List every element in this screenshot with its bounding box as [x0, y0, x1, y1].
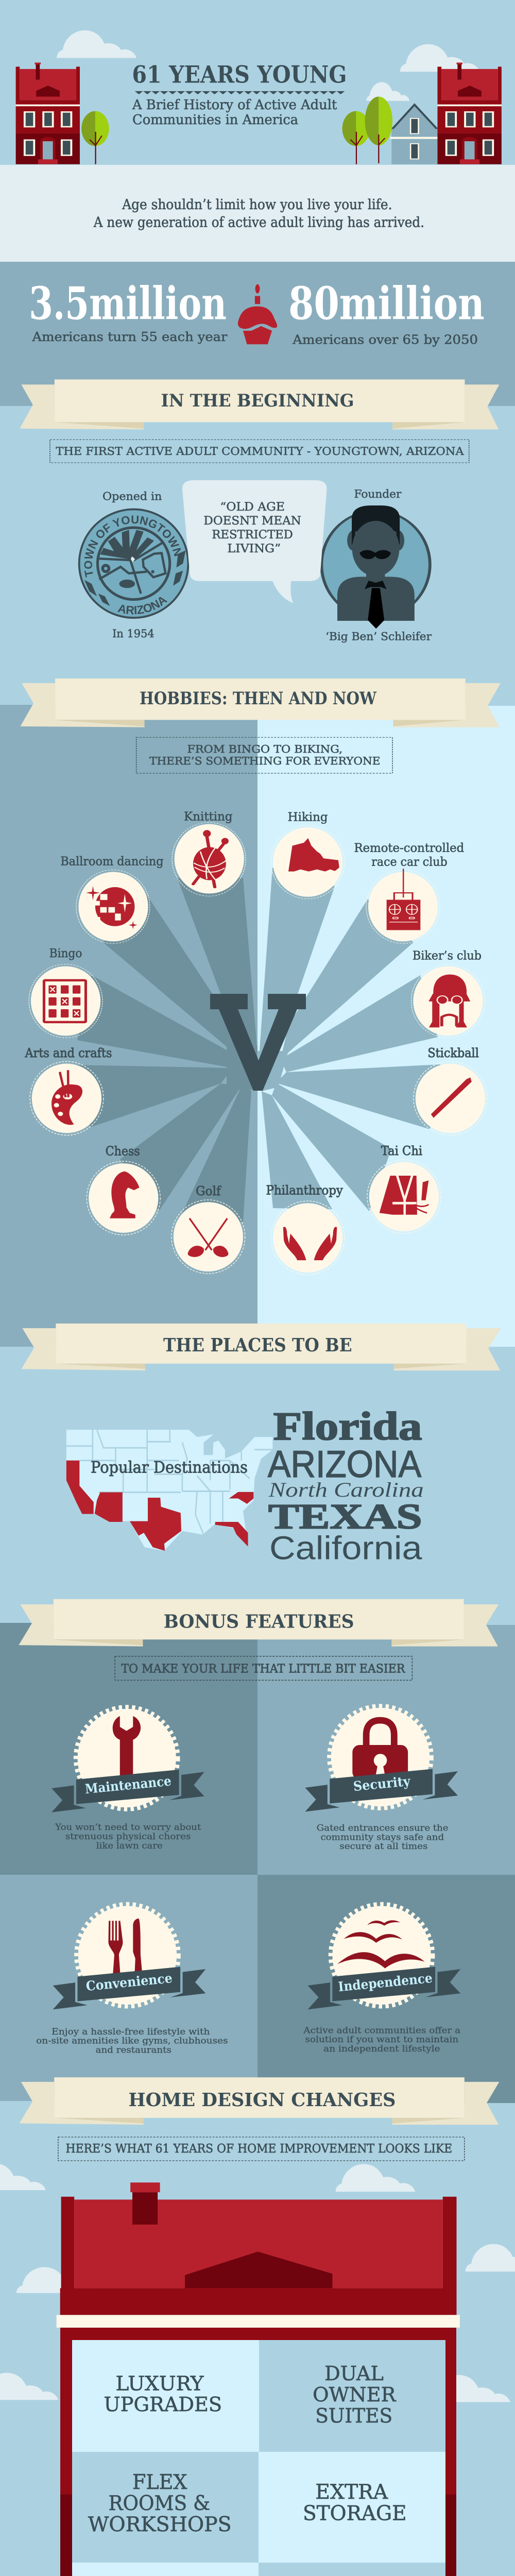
speech bubble: LIVING” [227, 541, 281, 555]
icon: town seal: TOWN OF YOUNGTOWN [84, 515, 181, 578]
label: big ben schleifer: ‘Big Ben’ Schleifer [325, 631, 432, 643]
cloud left [57, 30, 136, 58]
state names: ARIZONA [268, 1443, 421, 1485]
big house roof [57, 2182, 460, 2328]
title: 61 YEARS YOUNG [132, 61, 347, 89]
feature: independence: an independent lifestyle [323, 2044, 440, 2054]
hobby: biker's club [411, 948, 485, 1038]
panel: hobbies upper [21, 679, 501, 1038]
feature: convenience: on-site amenities like gyms, clubhouses [36, 2036, 228, 2046]
blue house [390, 105, 437, 164]
title divider [134, 91, 345, 94]
label: in 1954: In 1954 [112, 628, 154, 640]
hobby: tai chi: Tai Chi [381, 1144, 422, 1158]
feature: security: community stays safe and [320, 1832, 444, 1842]
hobby: arts and crafts [24, 1046, 112, 1135]
house right [437, 62, 502, 164]
feature: independence: solution if you want to maintain [305, 2035, 458, 2045]
heading ribbon: in the beginning [20, 379, 499, 429]
feature: maintenance: You won’t need to worry about [55, 1822, 201, 1833]
stat: 3.5 million: 3.5million [29, 278, 227, 330]
subtitle: A Brief History of Active Adult [132, 97, 337, 113]
stat: 80 million [288, 278, 485, 347]
feature: independence: Independence [337, 1971, 433, 1995]
tree left [81, 111, 109, 164]
speech bubble: DOESNT MEAN [203, 514, 301, 527]
text: luxury upgrades: LUXURY [115, 2372, 204, 2395]
clouds [0, 2163, 515, 2402]
subheading box: THERE’S SOMETHING FOR EVERYONE [149, 754, 381, 767]
panel: bonus features [19, 1599, 499, 2056]
hobby: stickball [414, 1046, 487, 1135]
hobby: chess [87, 1145, 160, 1235]
hobby: knitting [172, 809, 246, 896]
panel: home design changes [0, 2077, 515, 2402]
panel: home upgrades lower rows and ground [0, 2470, 515, 2576]
text: flex rooms and workshops: ROOMS & [108, 2492, 210, 2515]
text: dual owner suites: OWNER [313, 2383, 397, 2406]
label: opened in: Opened in [102, 490, 162, 503]
feature: independence: Active adult communities offer a [303, 2025, 460, 2036]
stat: 3.5 million: Americans turn 55 each year [32, 330, 228, 345]
feature: independence [303, 1905, 460, 2054]
hobby: remote-controlled race car club [354, 841, 464, 943]
hobby: knitting: Knitting [184, 809, 233, 823]
text: extra storage [303, 2480, 407, 2525]
subheading box [58, 2137, 465, 2161]
hobby: hiking [271, 809, 345, 899]
subheading box: FROM BINGO TO BIKING, [187, 743, 342, 755]
map: popular destinations [66, 1430, 272, 1551]
feature: convenience: and restaurants [96, 2045, 171, 2056]
hobby: bingo: Bingo [49, 946, 82, 960]
feature: security: Gated entrances ensure the [317, 1823, 449, 1833]
label: founder: Founder [354, 488, 402, 501]
speech bubble [182, 480, 327, 603]
rays: then (left) [74, 878, 258, 1222]
feature: security [305, 1706, 458, 1852]
heading ribbon: hobbies [21, 679, 501, 727]
hobby: ballroom dancing [60, 854, 164, 943]
cloud right [400, 44, 479, 72]
text: flex rooms and workshops: WORKSHOPS [88, 2513, 232, 2536]
icon: cupcake [238, 284, 277, 344]
icon: town seal [78, 508, 190, 619]
feature: maintenance: strenuous physical chores [65, 1832, 191, 1842]
hobby: philanthropy: Philanthropy [266, 1184, 343, 1198]
icon: town seal: ARIZONA [117, 597, 167, 614]
subheading box [115, 1656, 412, 1680]
heading ribbon: the places to be: THE PLACES TO BE [163, 1334, 352, 1355]
text: dual owner suites [313, 2362, 397, 2428]
hobby: golf [171, 1184, 245, 1274]
subtitle [132, 97, 337, 128]
rays: now (right) [258, 868, 440, 1211]
subheading box [50, 439, 469, 463]
text: luxury upgrades: UPGRADES [104, 2393, 222, 2416]
panel: in the beginning [20, 379, 500, 643]
text: flex rooms and workshops: FLEX [132, 2470, 187, 2494]
speech bubble: RESTRICTED [212, 528, 293, 541]
text: dual owner suites: SUITES [315, 2404, 392, 2428]
map: popular destinations: Popular Destinations [91, 1458, 248, 1477]
hobby: biker's club: Biker’s club [413, 948, 482, 962]
hobby: stickball: Stickball [427, 1046, 479, 1060]
founder portrait [321, 505, 430, 629]
panel: home upgrades top row [104, 2362, 397, 2428]
feature: security: Security [353, 1774, 411, 1794]
text: extra storage: STORAGE [303, 2502, 407, 2525]
text: extra storage: EXTRA [315, 2480, 388, 2504]
house left [16, 62, 80, 164]
hobby: remote-controlled race car club: Remote-controlled [354, 841, 464, 855]
hobby: bingo [29, 946, 102, 1038]
heading ribbon: the places to be [21, 1324, 501, 1370]
hobby: arts and crafts: Arts and crafts [24, 1046, 112, 1060]
text: luxury upgrades [104, 2372, 222, 2416]
feature: convenience: Convenience [85, 1971, 173, 1994]
state names [268, 1404, 424, 1566]
stat: 3.5 million [29, 278, 228, 345]
hobby: golf: Golf [196, 1184, 221, 1198]
heading ribbon: home design changes: HOME DESIGN CHANGES [128, 2089, 396, 2111]
big V [210, 994, 306, 1091]
hobby: remote-controlled race car club: race car club [371, 854, 448, 869]
state names: California [269, 1530, 422, 1566]
feature: security: secure at all times [339, 1841, 427, 1852]
intro text [93, 196, 424, 230]
feature: maintenance: Maintenance [84, 1773, 172, 1797]
heading ribbon: in the beginning: IN THE BEGINNING [161, 391, 354, 411]
text: dual owner suites: DUAL [324, 2362, 384, 2385]
state names: North Carolina [268, 1478, 424, 1501]
panel: hobbies lower [21, 1046, 501, 1566]
panel: header scene [16, 30, 502, 347]
heading ribbon: bonus features: BONUS FEATURES [164, 1611, 354, 1632]
house windows grid [72, 2340, 445, 2576]
feature: convenience: Enjoy a hassle-free lifestyle with [52, 2027, 210, 2037]
trees right [342, 97, 392, 164]
subtitle: Communities in America [132, 112, 298, 128]
state names: Florida [273, 1404, 422, 1448]
speech bubble: “OLD AGE [220, 500, 285, 513]
feature: convenience [36, 1905, 228, 2056]
state names: TEXAS [268, 1497, 422, 1536]
hobby: tai chi [367, 1144, 441, 1233]
big house walls [60, 2328, 456, 2576]
hobby: philanthropy [266, 1184, 345, 1275]
hobby: chess: Chess [106, 1145, 140, 1159]
cloud small [367, 82, 409, 101]
heading ribbon: bonus features [19, 1599, 499, 1647]
hobby: hiking: Hiking [288, 809, 328, 824]
subheading box [136, 737, 392, 773]
heading ribbon: home design changes [20, 2077, 499, 2125]
hobby: ballroom dancing: Ballroom dancing [60, 854, 164, 868]
feature: maintenance [52, 1707, 204, 1851]
text: flex rooms and workshops [88, 2470, 232, 2536]
subheading box: TO MAKE YOUR LIFE THAT LITTLE BIT EASIER [121, 1663, 405, 1676]
feature: maintenance: like lawn care [96, 1841, 163, 1851]
